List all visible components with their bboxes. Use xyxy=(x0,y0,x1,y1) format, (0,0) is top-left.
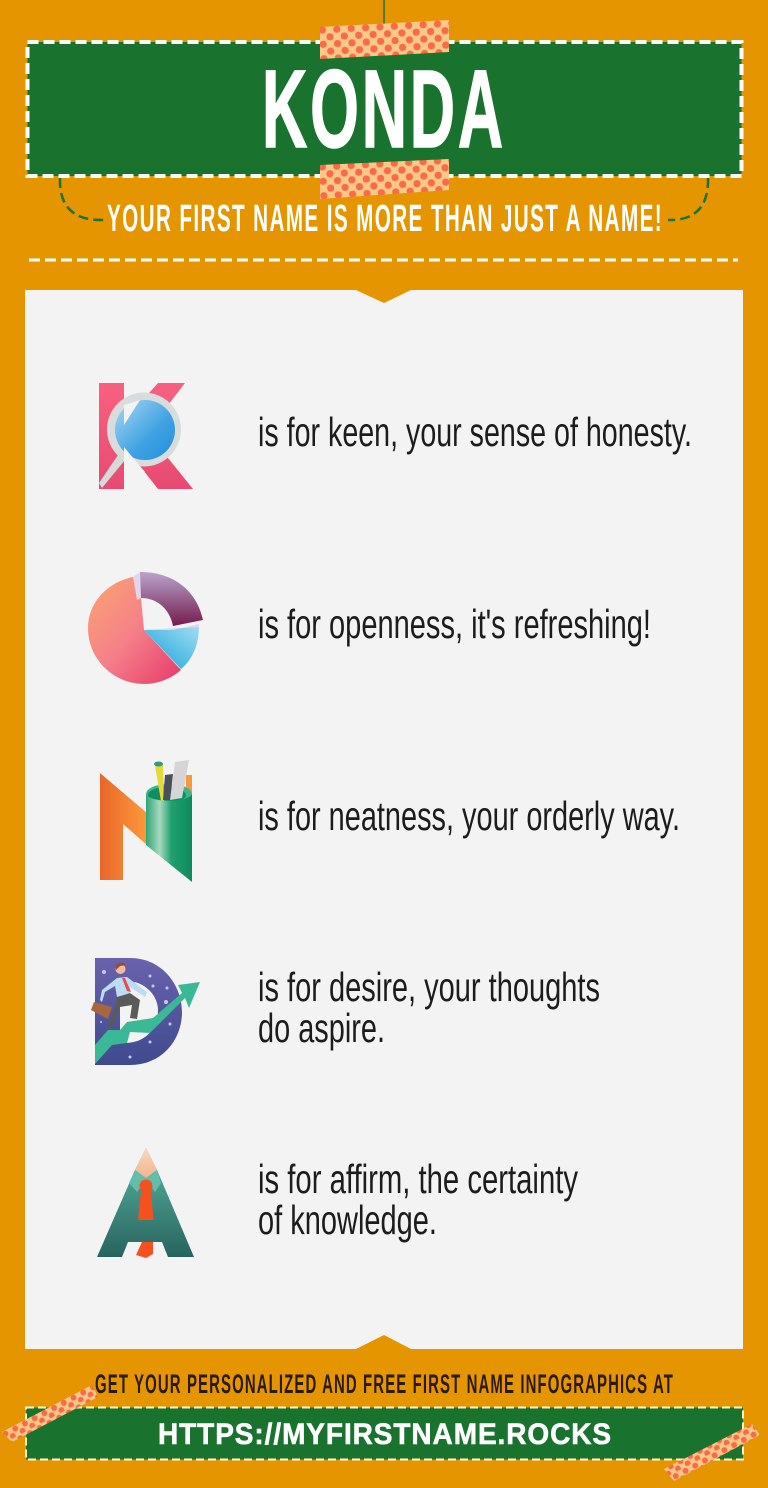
hanging string xyxy=(383,0,385,24)
panel: letters xyxy=(25,290,743,1349)
footer url: HTTPS://MYFIRSTNAME.ROCKS xyxy=(158,1418,612,1451)
icon: N pencil cup xyxy=(100,760,192,882)
tape: footer left xyxy=(2,1385,98,1442)
notch: top xyxy=(356,290,411,303)
icon: O pie chart xyxy=(88,572,203,684)
footer banner xyxy=(26,1408,743,1460)
tape: footer right xyxy=(664,1424,760,1481)
curved connector: left xyxy=(60,178,104,220)
text: A line 2: of knowledge. xyxy=(258,1197,437,1243)
notch: bottom xyxy=(356,1335,411,1349)
icon: A tie xyxy=(97,1148,194,1258)
text: D line 2: do aspire. xyxy=(258,1005,385,1051)
text: A line 1: is for affirm, the certainty xyxy=(258,1156,578,1202)
title banner xyxy=(28,20,742,199)
divider xyxy=(29,258,738,262)
tape: top xyxy=(320,20,449,59)
text: D line 1: is for desire, your thoughts xyxy=(258,964,600,1010)
curved connector: right xyxy=(668,178,708,220)
icon: D climbing man xyxy=(91,958,200,1065)
title: name: KONDA xyxy=(262,48,506,171)
tape: bottom xyxy=(320,159,449,199)
icon: K magnifier xyxy=(99,383,193,489)
